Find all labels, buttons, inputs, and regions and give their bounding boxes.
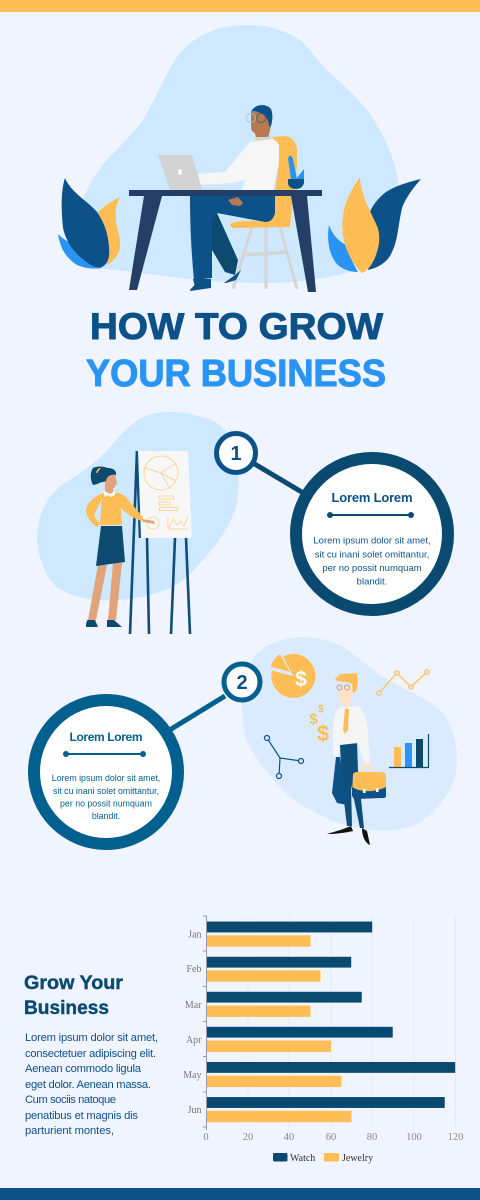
jewelry bars bbox=[206, 935, 352, 1122]
right leaves bbox=[328, 177, 421, 273]
circle card 1: blandit. bbox=[357, 576, 387, 588]
bar chart bbox=[183, 916, 463, 1164]
number badge 1: 1 bbox=[230, 443, 242, 465]
top bar bbox=[0, 0, 480, 12]
circle card 2: per no possit numquam bbox=[60, 798, 152, 808]
title: YOUR BUSINESS bbox=[86, 353, 386, 395]
body paragraph: eget dolor. Aenean massa. bbox=[25, 1079, 151, 1091]
easel legs bbox=[130, 451, 190, 634]
left leaves bbox=[58, 178, 120, 269]
network icon bbox=[264, 736, 304, 778]
grow your business heading: Grow Your bbox=[24, 973, 124, 994]
dollar signs: $ bbox=[318, 704, 324, 715]
circle card 2: blandit. bbox=[92, 811, 120, 821]
body paragraph: Cum sociis natoque bbox=[25, 1094, 116, 1106]
man at desk bbox=[190, 105, 279, 291]
number badge 2 bbox=[224, 664, 260, 700]
chair bbox=[230, 136, 297, 289]
legend bbox=[273, 1153, 373, 1164]
circle card 2 bbox=[34, 700, 178, 844]
number badge 1 bbox=[216, 434, 256, 472]
presenter illustration bbox=[37, 412, 239, 634]
line chart icon bbox=[377, 670, 429, 695]
body paragraph: Lorem ipsum dolor sit amet, bbox=[25, 1032, 158, 1044]
bottom bar bbox=[0, 1188, 480, 1200]
circle card 1: Lorem ipsum dolor sit amet, bbox=[313, 536, 431, 546]
month labels: Feb bbox=[186, 964, 202, 975]
pie icon with dollar: $ bbox=[295, 668, 307, 691]
business illustration bbox=[242, 637, 457, 845]
month labels bbox=[183, 930, 202, 1116]
bar chart icon bbox=[389, 734, 428, 768]
month labels: Apr bbox=[186, 1035, 202, 1046]
flip chart board bbox=[138, 451, 192, 538]
dollar signs: $ bbox=[317, 721, 329, 746]
value labels: 80 bbox=[367, 1132, 377, 1143]
callout 2 bbox=[34, 664, 260, 844]
value labels: 120 bbox=[448, 1132, 463, 1143]
value labels: 0 bbox=[203, 1132, 209, 1143]
value labels: 100 bbox=[406, 1132, 422, 1143]
dollar signs: $ bbox=[309, 711, 318, 728]
hero background blob bbox=[84, 25, 398, 283]
body paragraph: parturient montes, bbox=[25, 1125, 114, 1137]
grow your business heading: Business bbox=[24, 998, 109, 1019]
month labels: Jan bbox=[188, 930, 202, 940]
month labels: Jun bbox=[188, 1105, 202, 1116]
legend: Jewelry bbox=[342, 1153, 373, 1164]
body paragraph: penatibus et magnis dis bbox=[25, 1110, 138, 1122]
body paragraph bbox=[25, 1032, 158, 1137]
gridlines bbox=[248, 916, 456, 1127]
circle card 1: sit cu inani solet omittantur, bbox=[315, 550, 429, 560]
laptop bbox=[158, 155, 223, 190]
circle card 2: Lorem Lorem bbox=[70, 730, 142, 744]
connector line 1 bbox=[253, 463, 305, 494]
title bbox=[86, 306, 386, 395]
pie icon with dollar bbox=[270, 654, 315, 698]
month labels: May bbox=[183, 1070, 202, 1081]
circle card 2: Lorem ipsum dolor sit amet, bbox=[52, 773, 160, 783]
value labels: 60 bbox=[326, 1132, 336, 1143]
businessman bbox=[327, 673, 386, 845]
value labels: 20 bbox=[243, 1132, 253, 1143]
callout 1 bbox=[216, 434, 448, 610]
potted plant bbox=[288, 156, 304, 189]
dollar signs bbox=[309, 704, 329, 746]
circle card 1: Lorem Lorem bbox=[332, 490, 412, 505]
presenter woman bbox=[86, 466, 155, 627]
legend: Watch bbox=[290, 1153, 315, 1164]
month labels: Mar bbox=[185, 1000, 202, 1011]
hero illustration bbox=[58, 25, 421, 292]
value labels bbox=[203, 1132, 463, 1143]
grow your business heading bbox=[24, 973, 124, 1019]
circle card 1 bbox=[296, 458, 448, 610]
axes bbox=[203, 916, 206, 1130]
watch bars bbox=[206, 921, 456, 1108]
presenter blob bbox=[37, 412, 239, 600]
desk bbox=[129, 190, 322, 292]
circle card 2: sit cu inani solet omittantur, bbox=[53, 786, 159, 796]
body paragraph: consectetuer adipiscing elit. bbox=[25, 1048, 156, 1060]
body paragraph: Aenean commodo ligula bbox=[25, 1063, 142, 1075]
value labels: 40 bbox=[284, 1132, 294, 1143]
business blob bbox=[242, 637, 457, 831]
circle card 1: per no possit numquam bbox=[322, 563, 422, 574]
number badge 2: 2 bbox=[236, 672, 248, 694]
connector line 2 bbox=[168, 696, 225, 731]
title: HOW TO GROW bbox=[90, 306, 383, 347]
